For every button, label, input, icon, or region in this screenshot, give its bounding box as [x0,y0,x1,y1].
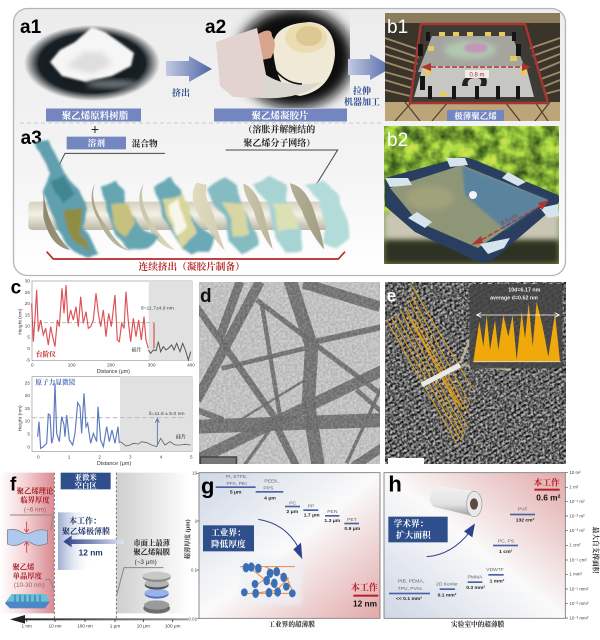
label b2: b2 [387,130,408,151]
arrow: trend h [427,523,475,557]
panel h: laboratory ultra-thin films [384,470,600,629]
data series: commercial films: PC [289,500,297,506]
y axis h: 最大自支撑面积 [591,527,600,575]
label f: f [10,475,17,496]
icon: necking film [7,522,47,553]
gel blob 6 [305,182,348,248]
data series: commercial films: PFA, PEI [227,481,247,487]
panel d: TEM of nanofibers [197,280,383,467]
data series: commercial films: PEN [327,509,338,515]
icon: film roll [430,486,482,517]
note: polyethylene network: （溶胀并解缠结的 [243,123,315,134]
data series: laboratory films: TPU, PVAc [398,586,423,592]
measure: 8.5 cm: 8.5 cm [500,213,519,227]
chart: atomic force microscope: 15 [25,406,30,411]
data series: laboratory films: 1 cm² [499,549,513,555]
chart: atomic force microscope: 5 [27,432,30,437]
note: polyethylene network [243,123,315,148]
scale bar e [388,458,424,464]
arrow: stretching: 机器加工 [344,96,380,107]
gel blob 4 [207,178,257,253]
gel blob 1 [35,142,98,258]
callout: this work: 聚乙烯极薄膜 [62,526,110,536]
data series: laboratory films: << 0.1 mm² [396,596,422,602]
scale bar d [200,457,236,465]
caption: ultra-thin film: 极薄聚乙烯 [454,111,497,121]
note: critical thickness: (~6 nm) [24,506,46,513]
note: single crystal thickness [12,562,45,589]
icon: crystal lamella [5,594,50,608]
data series: commercial films: PEEK, [264,479,279,485]
chart: profilometer: 20 [25,301,30,306]
chart: atomic force microscope: 0 [37,454,40,459]
callout: this work [58,512,123,570]
callout: reduce thickness: 降低厚度 [211,538,246,549]
panel e: HRTEM lattice fringes [385,282,566,465]
y axis g [183,471,199,622]
thickness axis: 10 nm [49,624,62,629]
note: single crystal thickness: 聚乙烯 [12,562,35,571]
arrow: stretching [344,54,393,107]
measure: 0.8 m: 0.8 m [469,72,485,78]
note: single crystal thickness: (10-30 nm) [14,582,45,589]
callout: this work 0.6 m2: 0.6 m² [536,493,561,503]
chart: atomic force microscope: 10 [25,419,30,424]
data series: commercial films: 1.7 μm [304,513,320,519]
callout: enlarge area [388,517,448,542]
callout: reduce thickness: 工业界： [211,527,246,538]
chart: profilometer: 10 [25,323,30,328]
chart: profilometer: 硅片 [132,346,142,353]
chart: profilometer: 300 [148,363,156,368]
chart: profilometer: 200 [107,363,115,368]
thickness axis: 100 nm [77,624,93,629]
orange lattice lines [387,285,473,443]
caption: gel sheet [214,108,347,122]
y axis h: 10⁻³ m² [569,528,585,533]
data series: commercial films [216,474,361,532]
axis title: distance: Distance (μm) [97,461,131,467]
data series: laboratory films: PIB, PEMA, [398,578,424,584]
icon: separator stack [143,572,171,614]
label d: d [200,286,212,307]
chart: profilometer: 台阶仪 [36,350,56,359]
chart: atomic force microscope: 5 [190,454,193,459]
inset: intensity profile [469,284,563,368]
callout: this work 12 nm [351,581,378,609]
thickness axis: 10 μm [137,624,150,629]
chart: atomic force microscope: δ=11.6 ± 5.0 nm [149,411,185,417]
callout: reduce thickness [203,525,254,551]
plus sign: + [91,121,99,137]
y axis g: 1 [195,519,198,524]
callout: this work 0.6 m2 [534,476,561,503]
thickness axis: 100 μm [165,624,181,629]
y axis h: 10⁻¹ m² [569,499,585,504]
callout: enlarge area: 扩大面积 [396,529,432,540]
y axis h: 10⁻³ mm² [569,615,589,620]
box: submicron gap [61,473,111,490]
arrow: stretching: 拉伸 [353,85,371,96]
photo b2: film on frame [384,126,560,264]
callout: this work 12 nm: 12 nm [353,599,377,609]
y axis h: 10⁻² m² [569,513,585,518]
chart: atomic force microscope: 4 [160,454,163,459]
note: commercial thinnest film: 市面上最薄 [133,539,171,548]
data series: commercial films: PPS [263,485,274,491]
data series: laboratory films: 0.3 mm² [466,585,485,591]
data series: laboratory films: PC, PS [498,538,515,544]
panel g: industrial ultra-thin films [183,471,380,629]
caption: gel sheet: 聚乙烯凝胶片 [251,110,309,122]
note: single crystal thickness: 单晶厚度 [13,571,43,580]
label c: c [11,277,21,298]
label a1: a1 [20,17,42,38]
chart: profilometer: 100 [68,363,76,368]
x axis title g: 工业界的超薄膜 [268,620,315,629]
y axis g: 10 [192,471,198,476]
inset: intensity profile: average d=0.62 nm [490,296,538,302]
data series: commercial films: 5 μm [230,489,242,495]
box: submicron gap: 亚微米 [75,473,97,482]
y axis g: 0.01 [189,617,198,622]
data series: laboratory films: 0.1 mm² [438,592,457,598]
caption: solvent: 溶剂 [88,137,105,148]
data series: laboratory films: VDWTF [486,567,504,573]
y axis h [565,470,600,620]
y axis h: 1 cm² [569,543,581,548]
chart: profilometer: -5 [26,358,30,363]
arrow: trend [258,519,302,559]
thickness axis [10,615,188,629]
measure: 0.8 m [465,70,489,78]
photo b1: stretching machine with ultra-thin film [385,13,560,121]
chart: atomic force microscope: 2 [98,454,101,459]
data series: laboratory films: PVF [518,507,528,513]
note: polyethylene network: 聚乙烯分子网络） [243,137,315,148]
inset: intensity profile: 10d=6.17 nm [508,288,541,294]
panel: a and b preparation process [14,8,566,276]
note: commercial thinnest film [133,539,171,566]
caption: resin [46,108,141,122]
chart: profilometer: 5 [27,335,30,340]
data series: laboratory films: 2D Kevlar [436,581,458,587]
thickness axis: 1 μm [110,624,120,629]
chart: profilometer: 15 [25,312,30,317]
chart: profilometer: Height (nm) [17,308,23,335]
chart: profilometer: Distance (μm) [97,369,130,375]
label e: e [387,286,397,306]
x axis title h: 实验室中的超薄膜 [451,620,505,629]
callout: this work: 本工作： [69,515,101,525]
data series: commercial films: PP [308,504,315,510]
chart: profilometer: 30 [25,278,30,283]
y axis h: 10 m² [569,470,581,475]
arrow: extrusion: 挤出 [172,87,190,98]
label a2: a2 [205,17,226,38]
caption: continuous extrusion: 连续挤出（凝胶片制备） [139,261,245,273]
y axis g: 超薄厚度 (μm) [183,519,192,559]
chart: atomic force microscope: 0 [27,445,30,450]
data series: commercial films: 4 μm [264,495,276,501]
photo a2: gel sheet roll [216,8,353,108]
gel blob 5 [255,177,302,253]
chart: atomic force microscope: 原子力显微镜 [35,377,76,386]
chart: profilometer [17,278,195,375]
thickness axis: 1 nm [21,624,32,629]
arrow: extrusion [166,56,212,98]
caption: solvent [67,137,158,149]
chart: atomic force microscope: Height (nm) [17,405,23,431]
data series: laboratory films: PMMA [468,574,483,580]
data series: commercial films: 2 μm [287,509,299,515]
gel blob 3 [153,177,213,255]
note: critical thickness: 临界厚度 [20,495,50,504]
callout: enlarge area: 学术界： [394,518,428,529]
label b1: b1 [387,17,408,38]
box: submicron gap: 空白区 [75,481,97,490]
label a3: a3 [21,128,42,149]
data series: commercial films: PI, ETFE, [226,474,247,480]
chart: atomic force microscope: 25 [25,380,30,385]
label h: h [388,472,402,497]
data series: laboratory films [389,507,535,602]
icon: molecular network [240,558,302,605]
caption: resin: 聚乙烯原料树脂 [62,110,129,122]
chart: atomic force microscope: 1 [68,454,71,459]
note: commercial thinnest film: 聚乙烯隔膜 [133,547,171,556]
chart: atomic force microscope: 3 [129,454,132,459]
chart: atomic force microscope: 硅片 [176,433,186,440]
y axis g: 0.1 [191,568,198,573]
chart: profilometer: 0 [27,346,30,351]
chart: profilometer: 25 [25,290,30,295]
y axis h: 10⁻¹ cm² [569,557,587,562]
caption: solvent: 混合物 [132,137,158,148]
y axis h: 10⁻² mm² [569,601,589,606]
chart: profilometer: δ=11.7±4.9 nm [141,306,174,312]
chart: atomic force microscope: 20 [25,393,30,398]
chart: profilometer: 400 [187,363,195,368]
photo a1: polyethylene resin powder [24,25,160,101]
data series: commercial films: PET [347,517,357,523]
chart: profilometer: 0 [31,363,34,368]
data series: laboratory films: 132 cm² [516,517,535,523]
y axis h: 1 mm² [569,572,583,577]
note: critical thickness [17,486,54,513]
panel c: height profiles [11,277,195,459]
callout: this work 0.6 m2: 本工作 [534,476,560,487]
data series: commercial films: 1.3 μm [324,518,341,524]
label g: g [201,473,214,498]
caption: ultra-thin film [447,110,504,121]
panel f: thickness scale [0,473,190,629]
y axis h: 10⁻¹ mm² [569,586,589,591]
diagram a3: extrusion screw with gel [21,123,348,273]
note: critical thickness: 聚乙烯理论 [17,486,54,495]
callout: this work: 12 nm [79,548,103,558]
callout: this work 12 nm: 本工作 [351,581,378,592]
data series: laboratory films: 1 mm² [490,578,505,584]
chart: atomic force microscope [17,377,193,459]
gel blob 2 [102,180,157,252]
y axis h: 1 m² [569,485,579,490]
data series: commercial films: 0.9 μm [344,526,361,532]
note: commercial thinnest film: (~3 μm) [135,559,157,566]
